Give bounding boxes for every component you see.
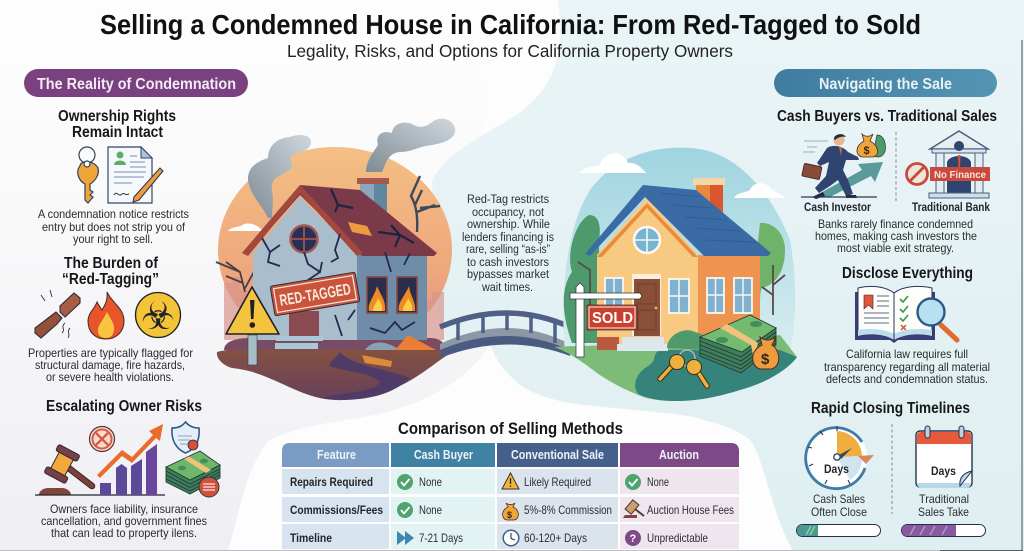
icon: cancelled circle (90, 426, 114, 452)
side wall (698, 255, 760, 343)
table header: cash buyer: Cash Buyer (414, 447, 473, 462)
row: commissions and fees: Auction House Fees (647, 503, 734, 517)
sold sign: SOLD (592, 310, 633, 327)
text: center explanation: occupancy, not (472, 205, 544, 219)
brick base (597, 337, 619, 350)
row: repairs required: None (419, 475, 442, 489)
gable trim (597, 203, 698, 257)
illustration: bridge (440, 313, 570, 358)
sunset backdrop (218, 147, 452, 353)
bare tree left (216, 262, 256, 292)
text: properties flagged: structural damage, fire hazards, (35, 358, 185, 372)
loose brick (362, 355, 392, 367)
cloud (228, 223, 262, 231)
sky blob (563, 148, 795, 352)
text: center explanation: to cash investors (467, 255, 549, 269)
icon: broken beam (35, 290, 80, 338)
bare tree right (411, 176, 440, 232)
row: timeline: Timeline (290, 531, 332, 545)
windows (605, 278, 752, 313)
cash stack (700, 315, 776, 373)
table header: auction (620, 443, 739, 467)
door (289, 311, 319, 337)
text: condemnation notice: your right to sell. (73, 232, 153, 246)
table title: Comparison of Selling Methods (398, 419, 623, 438)
roof patch (348, 222, 372, 236)
round window (290, 225, 318, 253)
label: cash sales often close: Often Close (811, 505, 867, 519)
icon: gavel (39, 444, 92, 495)
text: banks rarely finance (815, 217, 977, 255)
red-tagged sign (270, 272, 360, 316)
shrub behind house (224, 338, 445, 350)
table header: auction: Auction (659, 447, 699, 462)
illustration: sold house (554, 148, 797, 401)
background: lavender left wave (0, 60, 490, 551)
icon: flame (88, 292, 124, 339)
rubble orange (395, 335, 436, 350)
steps (617, 337, 668, 351)
text: center explanation: rare, selling “as-is” (466, 242, 550, 256)
sold sign (570, 283, 642, 357)
icon: biohazard: ☣ (141, 294, 175, 338)
heading: ownership rights: Ownership Rights (58, 108, 176, 125)
table header: cash buyer (391, 443, 495, 467)
grass dark (635, 350, 797, 401)
ground crack (320, 352, 410, 400)
table header: feature (282, 443, 389, 467)
heading: escalating owner risks: Escalating Owner Risks (46, 398, 202, 415)
icon: clock (806, 426, 874, 489)
panel: the reality of condemnation (24, 69, 248, 540)
ruined city silhouette (224, 277, 444, 340)
section pill: the reality of condemnation (24, 69, 248, 97)
money bag: $ (761, 351, 770, 368)
text: california law: California law requires full (846, 347, 968, 361)
text: banks rarely finance: homes, making cash investors the (815, 229, 977, 243)
burning windows (367, 277, 417, 313)
panel: navigating the sale (774, 69, 997, 536)
label: cash sales often close: Cash Sales (813, 492, 865, 506)
wall cracks (262, 234, 415, 336)
heading: ownership rights (58, 108, 176, 141)
text: owner risks: Owners face liability, insurance (50, 502, 198, 516)
row: commissions and fees: Commissions/Fees (290, 503, 383, 517)
section pill: navigating the sale (774, 69, 997, 97)
text: center explanation: lenders financing is (462, 230, 554, 244)
dashed divider (895, 132, 897, 203)
text: california law: defects and condemnation status. (826, 372, 988, 386)
text: owner risks (41, 502, 207, 540)
row: repairs required: Repairs Required (290, 475, 373, 489)
row: repairs required: None (647, 475, 669, 489)
panel: comparison table (282, 419, 739, 549)
red-tagged sign: RED-TAGGED (278, 281, 352, 310)
row: commissions and fees (282, 497, 739, 522)
label: traditional sales take: Sales Take (918, 505, 969, 519)
text: owner risks: that can lead to property ilens. (51, 526, 197, 540)
text: center explanation: ownership. While (467, 217, 550, 231)
row: timeline: 7-21 Days (419, 531, 463, 545)
roof cracks (331, 189, 414, 247)
clouds (580, 153, 784, 198)
text: center explanation: wait times. (481, 280, 533, 294)
front wall (597, 198, 698, 348)
row: commissions and fees: $ (507, 510, 512, 520)
text: california law (824, 347, 990, 386)
row: timeline (282, 524, 739, 549)
text: condemnation notice: A condemnation notice restricts (38, 207, 189, 221)
steps (275, 336, 323, 349)
text: center explanation: Red-Tag restricts (467, 192, 549, 206)
roof (585, 185, 771, 256)
icon: signed document (108, 147, 163, 203)
label: traditional sales take: Traditional (919, 492, 969, 506)
text: condemnation notice: entry but does not strip you of (42, 220, 186, 234)
chimney (357, 178, 389, 220)
subtitle: Legality, Risks, and Options for California Property Owners (287, 41, 733, 61)
background: blue right wave (432, 0, 1024, 551)
icon: calendar: Days (931, 466, 956, 478)
text: banks rarely finance: most viable exit strategy. (837, 241, 954, 255)
heading: the burden of red-tagging: The Burden of (64, 255, 159, 272)
text: properties flagged: or severe health violations. (46, 370, 174, 384)
chimney (693, 178, 725, 220)
left smoke (248, 135, 311, 218)
money bag (753, 337, 779, 369)
keys (660, 350, 707, 386)
roof gable trim (242, 185, 363, 256)
icon: book with magnifier (855, 286, 957, 343)
text: banks rarely finance: Banks rarely finance condemned (818, 217, 973, 231)
text: condemnation notice (38, 207, 189, 246)
table header: feature: Feature (317, 447, 356, 462)
round window (634, 227, 660, 253)
heading: cash buyers vs traditional sales: Cash Buyers vs. Traditional Sales (777, 108, 997, 125)
text: properties flagged (28, 346, 193, 384)
left tree (564, 215, 600, 343)
text: properties flagged: Properties are typically flagged for (28, 346, 193, 360)
row: timeline: ? (630, 533, 636, 545)
label: cash investor: Cash Investor (804, 200, 871, 214)
rubble (365, 342, 400, 350)
text: center explanation (462, 192, 554, 294)
icon: traditional bank with no finance (906, 131, 990, 198)
icon: cash investor: $ (864, 145, 870, 157)
warning sign (226, 287, 279, 365)
roof shingles (660, 193, 755, 242)
progress bar: cash sales (796, 524, 880, 536)
row: repairs required: Likely Required (524, 475, 591, 489)
icon: clock: Days (824, 464, 849, 476)
table header: conventional sale: Conventional Sale (511, 447, 604, 462)
progress bar: traditional sales (902, 524, 986, 536)
front wall (253, 197, 357, 340)
heading: the burden of red-tagging (62, 255, 159, 288)
roof (242, 185, 437, 256)
table header: conventional sale (497, 443, 618, 467)
icon: growth arrow behind investor (815, 162, 883, 197)
section pill: the reality of condemnation: The Reality of Condemnation (37, 76, 236, 93)
icon: calendar (916, 426, 972, 488)
label: traditional bank: Traditional Bank (912, 200, 990, 214)
icon: cash stack with badge (166, 451, 220, 497)
text: center explanation: bypasses market (467, 267, 549, 281)
side wall (357, 252, 427, 340)
heading: rapid closing timelines: Rapid Closing Timelines (811, 400, 970, 417)
row: repairs required (282, 469, 739, 494)
grass (554, 335, 797, 401)
row: commissions and fees: None (419, 503, 442, 517)
text: owner risks: cancellation, and government fines (41, 514, 207, 528)
icon: cash investor (801, 134, 886, 199)
row: timeline: 60-120+ Days (524, 531, 587, 545)
text: california law: transparency regarding all material (824, 360, 990, 374)
ground (217, 345, 457, 400)
row: timeline: Unpredictable (647, 531, 708, 545)
icon: key (78, 147, 98, 203)
label: cash sales often close (811, 492, 867, 519)
icon: insurance shield (172, 422, 199, 453)
row: commissions and fees: 5%-8% Commission (524, 503, 612, 517)
heading: disclose everything: Disclose Everything (842, 265, 973, 282)
right tree (756, 223, 785, 315)
title: Selling a Condemned House in California: From Red-Tagged to Sold (100, 9, 921, 40)
icon: traditional bank with no finance: No Finance (934, 169, 986, 181)
chart: rising bars with arrow (35, 424, 165, 495)
door (632, 274, 661, 336)
heading: ownership rights: Remain Intact (72, 124, 163, 141)
section pill: navigating the sale: Navigating the Sale (819, 76, 952, 93)
illustration: condemned house (216, 119, 457, 400)
shrubs (667, 330, 712, 350)
right smoke (366, 119, 455, 172)
dashed divider (891, 424, 893, 514)
label: traditional sales take (918, 492, 969, 519)
heading: the burden of red-tagging: “Red-Tagging” (62, 271, 159, 288)
